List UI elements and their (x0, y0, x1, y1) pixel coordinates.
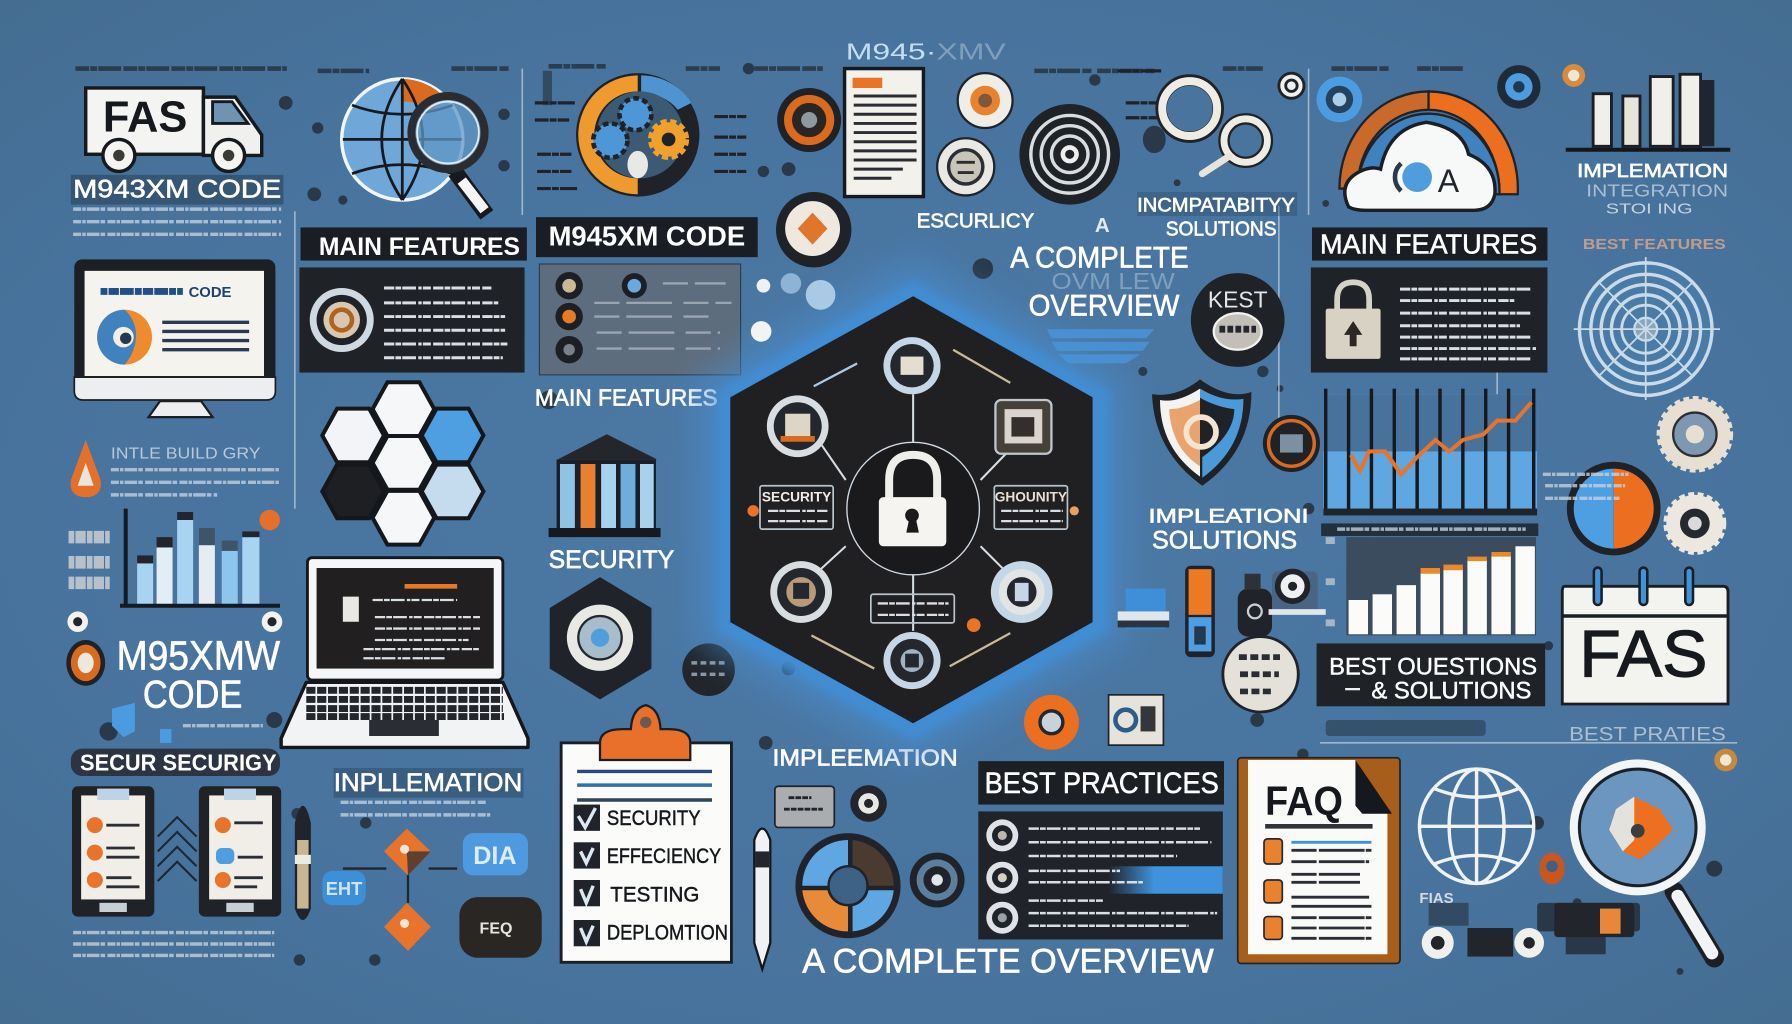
icon: white gear lower (1666, 495, 1723, 552)
section header: best questions and solutions (1317, 643, 1545, 706)
panel: monitor: CODE (189, 285, 232, 301)
icon: delivery truck FAS: FAS (103, 93, 187, 141)
glyph A: A (1095, 214, 1110, 237)
heading: implementation solutions: SOLUTIONS (1152, 527, 1297, 555)
heading: implementation: INPLLEMATION (334, 769, 522, 797)
icon: pen (754, 829, 770, 969)
heading: incompatibility solutions: INCMPATABITYY (1137, 194, 1295, 216)
check item: testing: TESTING (610, 882, 699, 907)
icon: phone left (72, 786, 154, 917)
text block: intle caption (111, 470, 279, 495)
label: bottom tag: FIAS (1419, 891, 1454, 907)
icon: small orange coin (1562, 64, 1585, 87)
icon: delivery truck FAS (86, 88, 262, 171)
icon: dark blue ring (1497, 65, 1541, 109)
section header: secure security: SECUR SECURIGY (80, 749, 277, 775)
panel: central security hexagon (729, 295, 1094, 725)
icon: white disc orange core (958, 73, 1013, 128)
icon: target (1019, 104, 1120, 205)
icon: blue ring (1317, 77, 1362, 122)
thin vertical rules (295, 69, 1737, 743)
panel: grey feature list (539, 264, 741, 375)
badge: EHT: EHT (326, 878, 362, 899)
icon: small bottle (1238, 574, 1272, 637)
heading: A complete overview centre: OVERVIEW (1029, 289, 1179, 322)
section header: best questions and solutions: & SOLUTIONS (1371, 677, 1531, 704)
section header: best questions and solutions: BEST OUESTIONS (1329, 653, 1537, 680)
blue stripes (1047, 329, 1154, 363)
icon: calendar FAS: FAS (1579, 618, 1707, 692)
icon: pie (1567, 462, 1661, 555)
icon: gear cluster bottom (1422, 903, 1634, 959)
check item: deployment: DEPLOMTION (607, 919, 728, 944)
icon: grey box (775, 786, 834, 827)
small white discs (67, 611, 282, 632)
label: security right: GHOUNITY (995, 490, 1067, 505)
check item: security (574, 805, 701, 831)
icon: FAQ document (1238, 758, 1400, 963)
icon: gears dial (576, 73, 699, 197)
icon: white disc face (937, 138, 994, 195)
heading: implementation solutions: IMPLEATIONI (1149, 505, 1309, 527)
icon: KEST badge (1191, 273, 1285, 367)
heading: A complete overview centre: A COMPLETE (1010, 241, 1189, 274)
label: bottom box (871, 594, 981, 632)
icon: flame (71, 440, 101, 497)
node: bottom (883, 632, 941, 689)
node: right top (995, 400, 1051, 454)
icon: small orange disc (1539, 853, 1565, 885)
text lines by gear (1543, 474, 1629, 498)
icon: white gear upper (1659, 399, 1730, 470)
node: left bottom (770, 561, 832, 623)
small circles above hexagon (751, 273, 835, 342)
check item: testing (574, 880, 699, 907)
bar chart: top right (1566, 74, 1730, 150)
section header: M945XM code: M945XM CODE (549, 221, 745, 252)
icon: cloud with arc (1339, 91, 1518, 210)
heading: security garbled: ESCURLICY (917, 209, 1035, 232)
check item: efficiency: EFFECIENCY (607, 843, 721, 868)
central hexagon glow (718, 281, 1109, 741)
panel: main features description (299, 267, 525, 373)
badge: EHT (322, 871, 366, 905)
heading: incompatibility solutions: SOLUTIONS (1166, 217, 1277, 240)
icon: wire globe (1419, 769, 1534, 883)
text block: implementation caption (341, 802, 491, 815)
icon: orange lens (1024, 695, 1079, 750)
icon: orange ring left (66, 640, 105, 686)
icon: FAQ document: FAQ (1265, 778, 1343, 824)
panel: monitor (74, 259, 275, 417)
icon: concentric ring (910, 853, 965, 907)
chart: lower bars (1321, 523, 1538, 635)
heading: M945 XMV top: M945· XMV (846, 38, 1007, 64)
heading: implementation top right: STOI ING (1606, 202, 1693, 218)
accent strokes (811, 350, 1010, 669)
heading: implementation top right: IMPLEMATION (1577, 160, 1728, 181)
icon: orange dial (1263, 415, 1320, 472)
zigzag connector (158, 817, 197, 881)
heading: M945XM code top left: M943XM CODE (73, 176, 281, 204)
section header: best practices: BEST PRACTICES (985, 767, 1219, 800)
section header: M945XM code (536, 217, 758, 257)
heading: implementation top right: INTEGRATION (1586, 181, 1728, 201)
heading: M95XMW code: CODE (143, 673, 242, 716)
check item: efficiency (574, 842, 721, 869)
heading: A complete overview centre (1010, 241, 1189, 322)
icon: spiral eye (1279, 73, 1304, 98)
icon: camera box (1109, 695, 1163, 745)
text block: intro caption (73, 209, 281, 234)
icon: stylus (295, 806, 311, 920)
check item: deployment (574, 919, 728, 946)
heading: best features faint: BEST FEATURES (1583, 237, 1726, 253)
icon: shield (1152, 379, 1251, 486)
icon: security diamond disc (776, 192, 851, 267)
icon: white disc with text (1223, 637, 1298, 712)
icon: orange ring (777, 88, 841, 152)
check item: security: SECURITY (607, 805, 701, 830)
label: security left (747, 486, 833, 529)
icon: eye device (1269, 571, 1326, 615)
badge: FEQ: FEQ (480, 921, 512, 938)
central hexagon wide glow (697, 257, 1126, 763)
icon: blue tag (112, 703, 263, 743)
heading: M95XMW code: M95XMW (117, 633, 280, 679)
panel: main features lock (1311, 267, 1547, 373)
icon: dark oval (1143, 126, 1166, 153)
icon: linked rings (1161, 80, 1267, 174)
icon: document (845, 69, 923, 197)
text lines by target (1118, 71, 1161, 118)
badge: DIA (463, 833, 528, 875)
icon: magnifier (1574, 763, 1714, 958)
icon: blue folder (1118, 589, 1169, 629)
badge: DIA: DIA (473, 842, 516, 870)
node: right bottom (991, 561, 1053, 623)
label: security left: SECURITY (762, 490, 831, 505)
section header: main features right: MAIN FEATURES (1320, 229, 1537, 260)
text lines beside gears (535, 103, 746, 189)
badge: FEQ (459, 897, 542, 958)
heading: M95XMW code (117, 633, 280, 716)
icon: cloud with arc: A (1438, 163, 1460, 199)
lock ring (847, 442, 979, 575)
heading: implementation solutions (1149, 505, 1309, 555)
icon: battery cylinder (1185, 566, 1215, 657)
icon: orange diamonds (343, 829, 457, 951)
panel: best practices list (978, 811, 1223, 939)
section header: main features left: MAIN FEATURES (319, 233, 520, 261)
heading: main features centre: MAIN FEATURES (535, 385, 718, 411)
icon: hexagon cluster (322, 382, 483, 545)
chart: donut (795, 833, 901, 938)
icon: laptop (281, 558, 528, 747)
icon: dark blob (682, 643, 735, 696)
heading: incompatibility solutions (1137, 192, 1297, 240)
bar chart: left (69, 509, 280, 606)
icon: security hexagon (550, 577, 651, 699)
heading: implementation top right (1577, 160, 1728, 218)
icon: globe with magnifier (342, 79, 487, 215)
heading: A complete overview bottom: A COMPLETE OVERVIEW (802, 943, 1214, 981)
label: security right (994, 486, 1079, 529)
icon: KEST badge: KEST (1208, 286, 1268, 312)
icon: camera lens (850, 785, 887, 822)
node: left top (767, 395, 829, 457)
heading: A complete overview centre: OVM LEW (1051, 268, 1175, 294)
text block: bottom left caption (73, 933, 274, 955)
icon: bank building (549, 434, 661, 537)
heading: intle block: INTLE BUILD GRY (111, 445, 261, 462)
icon: padlock (879, 455, 946, 546)
chart: line over columns (1323, 389, 1537, 515)
icon: phone right (199, 786, 281, 917)
heading: security: SECURITY (549, 546, 675, 574)
icon: calendar FAS (1562, 571, 1728, 704)
heading: implementation lower: IMPLEEMATION (773, 745, 958, 771)
icon: radar (1574, 257, 1720, 400)
node: top (883, 337, 941, 394)
icon: small amber coin (1714, 749, 1737, 771)
panel: checklist clipboard (561, 705, 731, 962)
heading: best practices faint: BEST PRATIES (1569, 724, 1726, 746)
